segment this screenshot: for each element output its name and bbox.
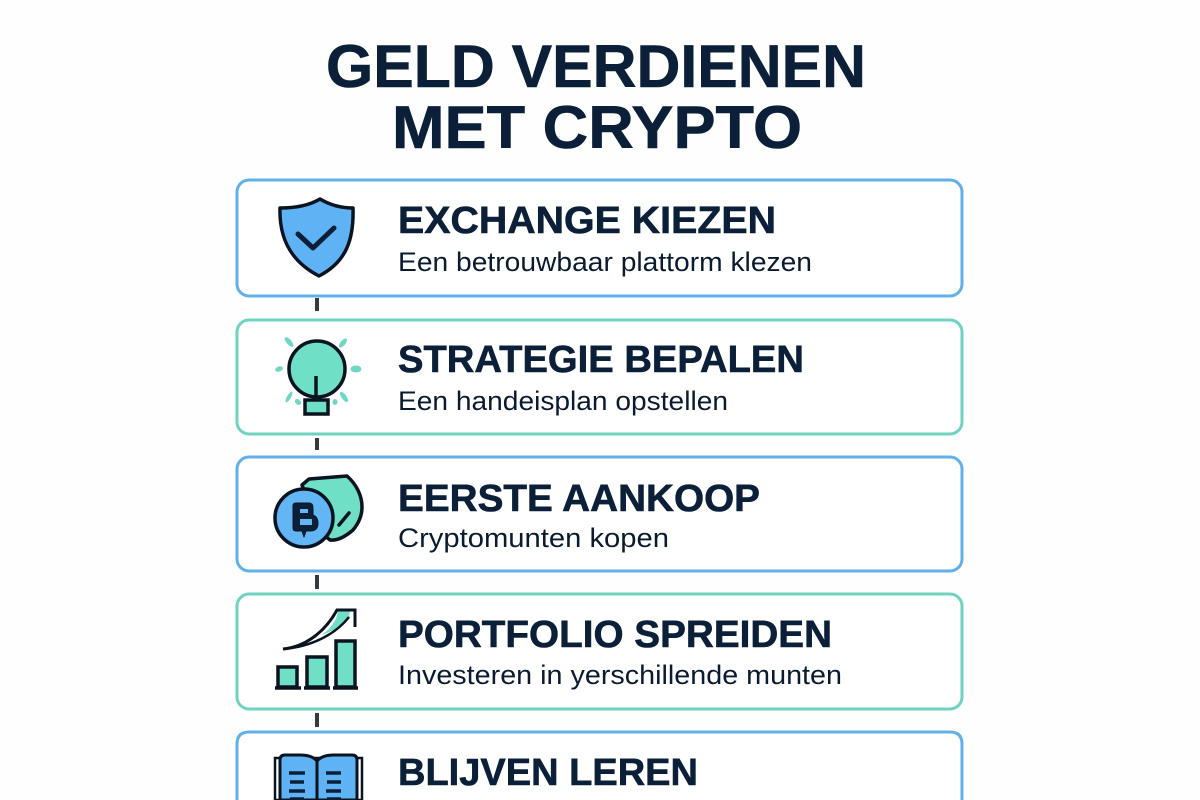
panel: eerste aankoop — [237, 457, 962, 571]
icon: growth chart — [275, 610, 358, 688]
icon: coins — [275, 476, 362, 547]
panel: strategie bepalen — [237, 320, 962, 434]
title: MET CRYPTO — [392, 94, 802, 161]
heading: EERSTE AANKOOP — [398, 478, 760, 520]
icon: open book — [275, 755, 362, 800]
connector — [315, 575, 319, 589]
heading: PORTFOLIO SPREIDEN — [398, 614, 832, 656]
connector — [315, 438, 319, 450]
connector — [315, 298, 319, 311]
panel: blijven leren — [237, 732, 962, 800]
heading: BLIJVEN LEREN — [398, 752, 698, 794]
icon: shield — [280, 199, 353, 276]
icon: light bulb — [274, 336, 362, 414]
description: Cryptomunten kopen — [398, 523, 669, 553]
panel: exchange kiezen — [237, 180, 962, 296]
panel: portfolio spreiden — [237, 594, 962, 709]
heading: STRATEGIE BEPALEN — [398, 339, 804, 381]
description: Een betrouwbaar plattorm klezen — [398, 247, 812, 277]
connector — [315, 713, 319, 727]
title: GELD VERDIENEN — [326, 33, 866, 100]
heading: EXCHANGE KIEZEN — [398, 200, 776, 242]
description: Een handeisplan opstellen — [398, 386, 728, 416]
title — [326, 33, 866, 161]
description: Investeren in yerschillende munten — [398, 660, 842, 690]
